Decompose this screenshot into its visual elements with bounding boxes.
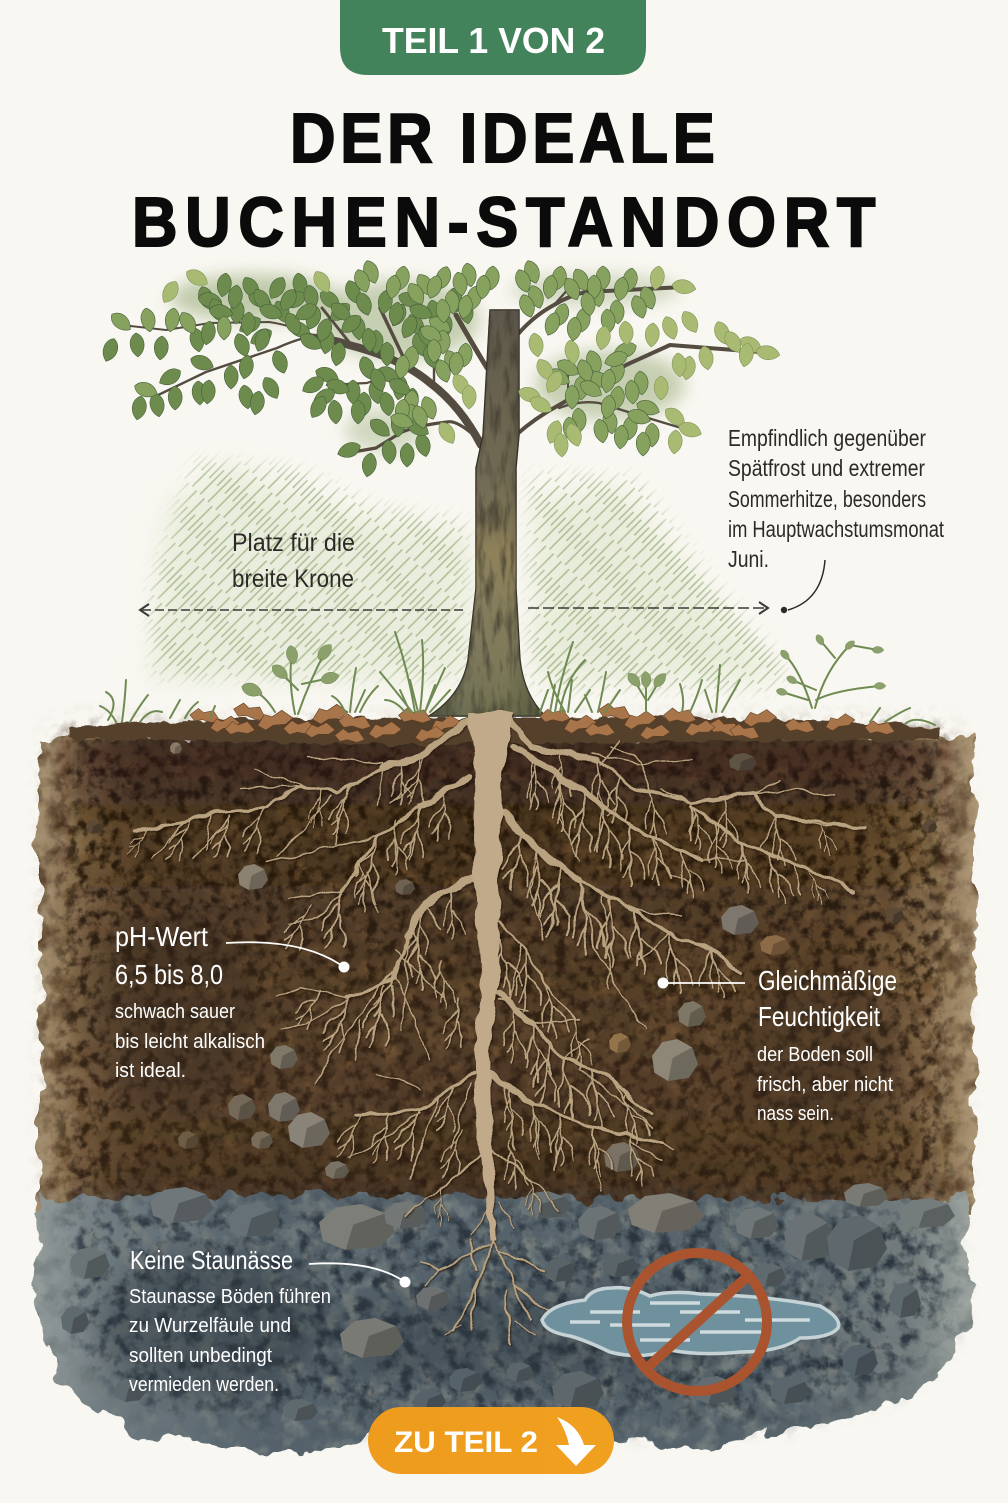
crown watercolor wash xyxy=(170,274,685,452)
title xyxy=(132,100,875,262)
frost note xyxy=(728,425,944,572)
soil layer xyxy=(40,732,975,1215)
part badge xyxy=(340,0,646,75)
frost note: im Hauptwachstumsmonat xyxy=(728,516,944,542)
next part button xyxy=(368,1407,614,1474)
crown label: breite Krone xyxy=(232,565,354,593)
crown label: Platz für die xyxy=(232,529,355,557)
tree: trunk xyxy=(429,310,545,716)
callout: pH value: 6,5 bis 8,0 xyxy=(115,959,223,990)
part badge: TEIL 1 VON 2 xyxy=(382,20,605,61)
frost note leader xyxy=(781,560,825,613)
callout: no waterlogging xyxy=(129,1245,410,1396)
callout: even moisture: der Boden soll xyxy=(757,1044,873,1066)
callout: pH value: ist ideal. xyxy=(115,1060,186,1082)
callout: no waterlogging: zu Wurzelfäule und xyxy=(129,1315,291,1337)
title: DER IDEALE xyxy=(290,100,715,178)
crown arrow right xyxy=(528,602,768,614)
callout: even moisture xyxy=(658,965,897,1125)
crown space hatching xyxy=(130,440,800,700)
crown arrow left xyxy=(140,604,463,616)
callout: pH value: bis leicht alkalisch xyxy=(115,1031,265,1053)
frost note: Sommerhitze, besonders xyxy=(728,486,926,512)
ground plants xyxy=(100,632,935,725)
frost note: Spätfrost und extremer xyxy=(728,455,925,481)
callout: even moisture: Feuchtigkeit xyxy=(758,1001,880,1032)
tree: leaves xyxy=(100,258,781,478)
prohibition sign xyxy=(627,1253,767,1391)
frost note: Empfindlich gegenüber xyxy=(728,425,926,451)
callout: pH value: schwach sauer xyxy=(115,1001,235,1023)
callout: no waterlogging: Keine Staunässe xyxy=(130,1245,293,1275)
callout: no waterlogging: vermieden werden. xyxy=(129,1374,279,1396)
next part button: ZU TEIL 2 xyxy=(394,1426,538,1459)
frost note: Juni. xyxy=(728,546,769,572)
tree: branches xyxy=(121,287,760,452)
ground line and leaf litter xyxy=(68,700,940,745)
stones in soil xyxy=(86,742,937,1179)
roots xyxy=(124,712,864,1345)
callout: no waterlogging: Staunasse Böden führen xyxy=(129,1286,331,1308)
crown label xyxy=(232,529,355,593)
callout: no waterlogging: sollten unbedingt xyxy=(129,1345,272,1367)
callout: even moisture: Gleichmäßige xyxy=(758,965,897,996)
gravel layer xyxy=(35,1194,972,1455)
puddle xyxy=(542,1288,839,1356)
plant leaves xyxy=(240,633,886,699)
title: BUCHEN-STANDORT xyxy=(132,184,875,262)
callout: even moisture: frisch, aber nicht xyxy=(757,1074,893,1096)
callout: pH value xyxy=(115,921,350,1082)
callout: pH value: pH-Wert xyxy=(115,921,208,952)
stones in gravel xyxy=(61,1183,955,1421)
callout: even moisture: nass sein. xyxy=(757,1103,834,1125)
